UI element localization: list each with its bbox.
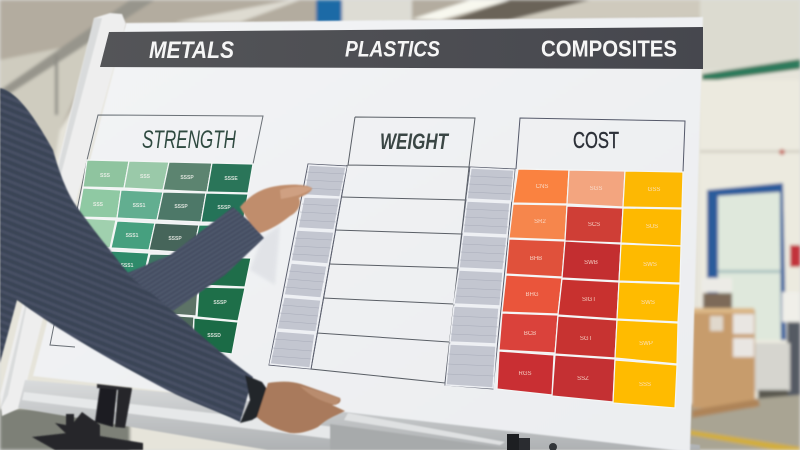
heading: plastics: PLASTICS [345, 36, 440, 62]
cost cell labels: CNS [536, 184, 548, 190]
door window [718, 192, 781, 340]
strength cell labels: SSSE [224, 176, 238, 182]
cost cell labels: SWS [643, 262, 657, 268]
cost cell labels: BCB [524, 331, 536, 337]
strip ruling [272, 172, 345, 359]
cost cell labels: SR2 [534, 219, 546, 225]
heading: composites: COMPOSITES [541, 36, 677, 62]
cost cell labels: RGS [518, 371, 532, 377]
strength title: STRENGTH [142, 126, 237, 154]
lower cuff [240, 375, 269, 423]
black bracket bottom [507, 434, 557, 450]
grey slider strip left [269, 164, 347, 369]
panel: weight [311, 117, 475, 383]
dark fixture [445, 0, 590, 22]
strength cell labels: SSSP [180, 175, 194, 181]
strength cell labels: SSS [93, 202, 104, 208]
strength colour grid [72, 160, 253, 354]
cost cell labels: SIGT [582, 297, 596, 303]
grey container [754, 343, 790, 391]
strength cell labels: SSS [100, 173, 111, 179]
stacked box [702, 278, 732, 292]
cost cell labels: SWB [584, 260, 598, 266]
strength cell labels: SSSP [213, 300, 227, 306]
cost cell labels: BHG [525, 292, 539, 298]
cost title: COST [573, 127, 619, 153]
upper hand [240, 185, 312, 233]
floor [680, 395, 800, 450]
cost cell labels: SCS [588, 222, 600, 228]
ceiling [0, 0, 700, 130]
upper right ceiling [700, 0, 800, 70]
cost cell labels: SUS [646, 224, 658, 230]
beam [175, 0, 300, 22]
cost cell labels: SGT [580, 336, 592, 342]
grey slider strip right [445, 167, 515, 389]
cost cell labels: SGS [590, 186, 602, 192]
strength cell labels: SSS [140, 174, 151, 180]
person's raised forearm [127, 185, 312, 311]
left wall [0, 40, 100, 300]
panel: cost [497, 118, 685, 408]
cost cell labels: SWP [639, 341, 653, 347]
cost colour grid [497, 169, 683, 408]
heading: metals: METALS [149, 37, 234, 64]
weight title: WEIGHT [380, 129, 449, 154]
strength cell labels: SSSD [207, 333, 221, 339]
cost cell labels: SWS [641, 300, 655, 306]
cost cell labels: BHB [530, 256, 542, 262]
black clamp fixture [32, 384, 143, 450]
panel: strength [50, 115, 263, 354]
header band [100, 27, 703, 69]
strength cell labels: SSS1 [126, 233, 139, 239]
cost cell labels [518, 184, 660, 388]
strength cell labels: SSSP [217, 205, 231, 211]
cost cell labels: SSS [639, 382, 651, 388]
strength cell labels: SSS1 [133, 203, 146, 209]
strength cell labels: SSS1 [121, 263, 134, 269]
strength cell labels: SSSP [174, 204, 188, 210]
lower rail [18, 380, 700, 450]
cost cell labels: GSS [648, 187, 660, 193]
board shadow from arm [250, 225, 280, 285]
person's torso and near arm [0, 88, 345, 433]
ceiling light [412, 0, 510, 20]
strip ruling [447, 176, 513, 376]
lower left floor [0, 408, 130, 450]
lower hand [257, 382, 345, 433]
weight table rows [317, 197, 465, 342]
strength cell labels: SSSP [168, 236, 182, 242]
cost cell labels: SSZ [577, 376, 589, 382]
red sign [790, 245, 800, 267]
right wall [700, 80, 800, 420]
white panel and dark door [782, 292, 800, 322]
door frame [707, 183, 786, 340]
green stripe [702, 59, 800, 82]
pallet boxes [692, 310, 755, 408]
pipes left [0, 0, 155, 100]
strength cell labels [93, 173, 238, 339]
light wall section [342, 0, 412, 24]
blue column [316, 0, 342, 24]
